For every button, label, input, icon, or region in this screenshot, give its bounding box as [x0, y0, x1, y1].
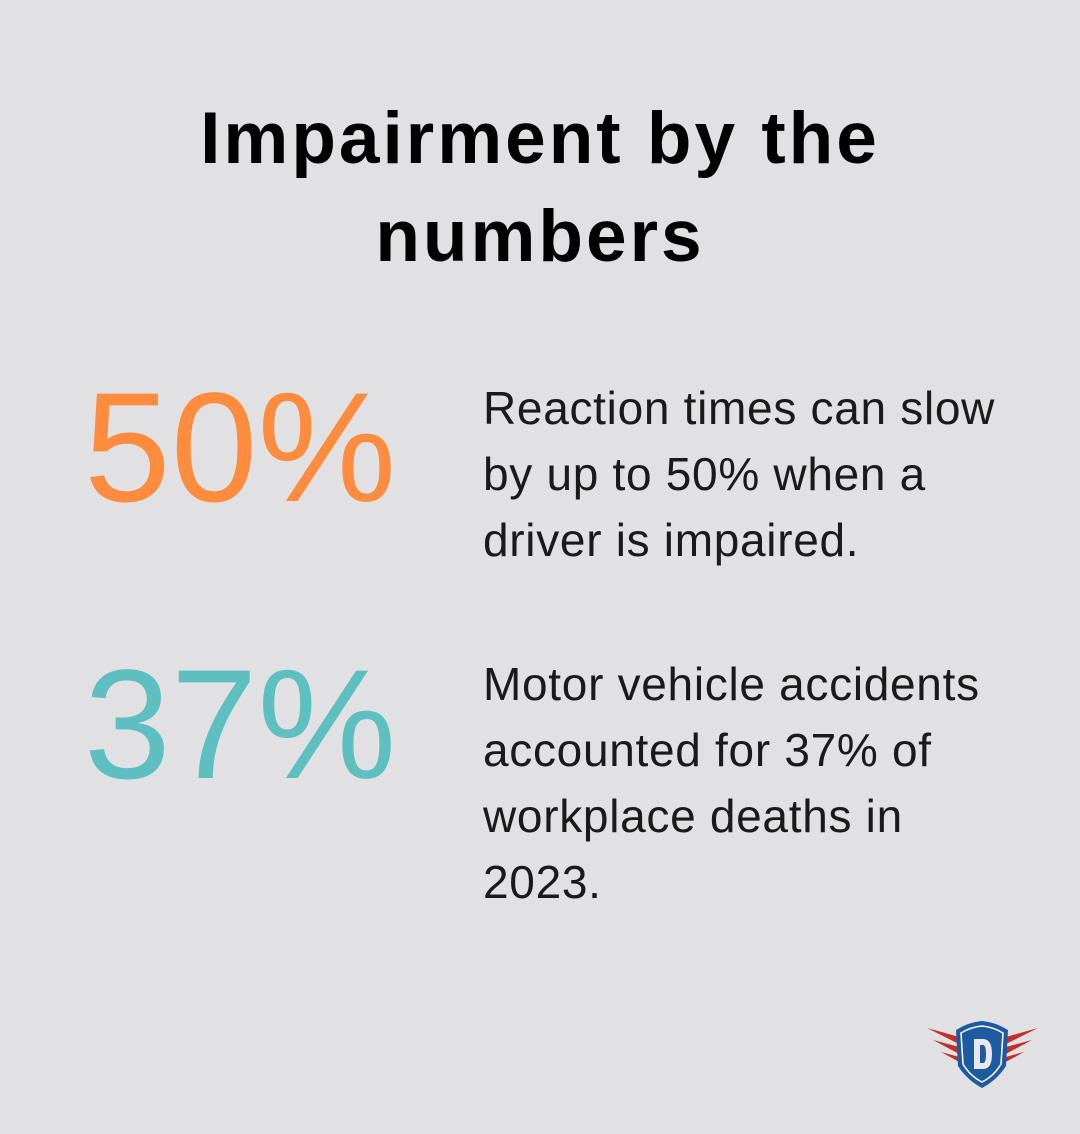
- title: numbers: [375, 196, 705, 277]
- description 50%: driver is impaired.: [483, 514, 859, 566]
- title: Impairment by the: [200, 98, 880, 179]
- description 37%: [483, 658, 980, 908]
- description 50%: [483, 382, 995, 566]
- description 50%: Reaction times can slow: [483, 382, 995, 434]
- description 37%: accounted for 37% of: [483, 724, 932, 776]
- stat 50%: 50%: [84, 361, 396, 535]
- description 37%: workplace deaths in: [483, 790, 903, 842]
- description 37%: Motor vehicle accidents: [483, 658, 980, 710]
- icon: logo: [927, 1021, 1038, 1088]
- title: [200, 98, 880, 277]
- stat 37%: 37%: [84, 638, 396, 812]
- description 50%: by up to 50% when a: [483, 448, 926, 500]
- description 37%: 2023.: [483, 856, 602, 908]
